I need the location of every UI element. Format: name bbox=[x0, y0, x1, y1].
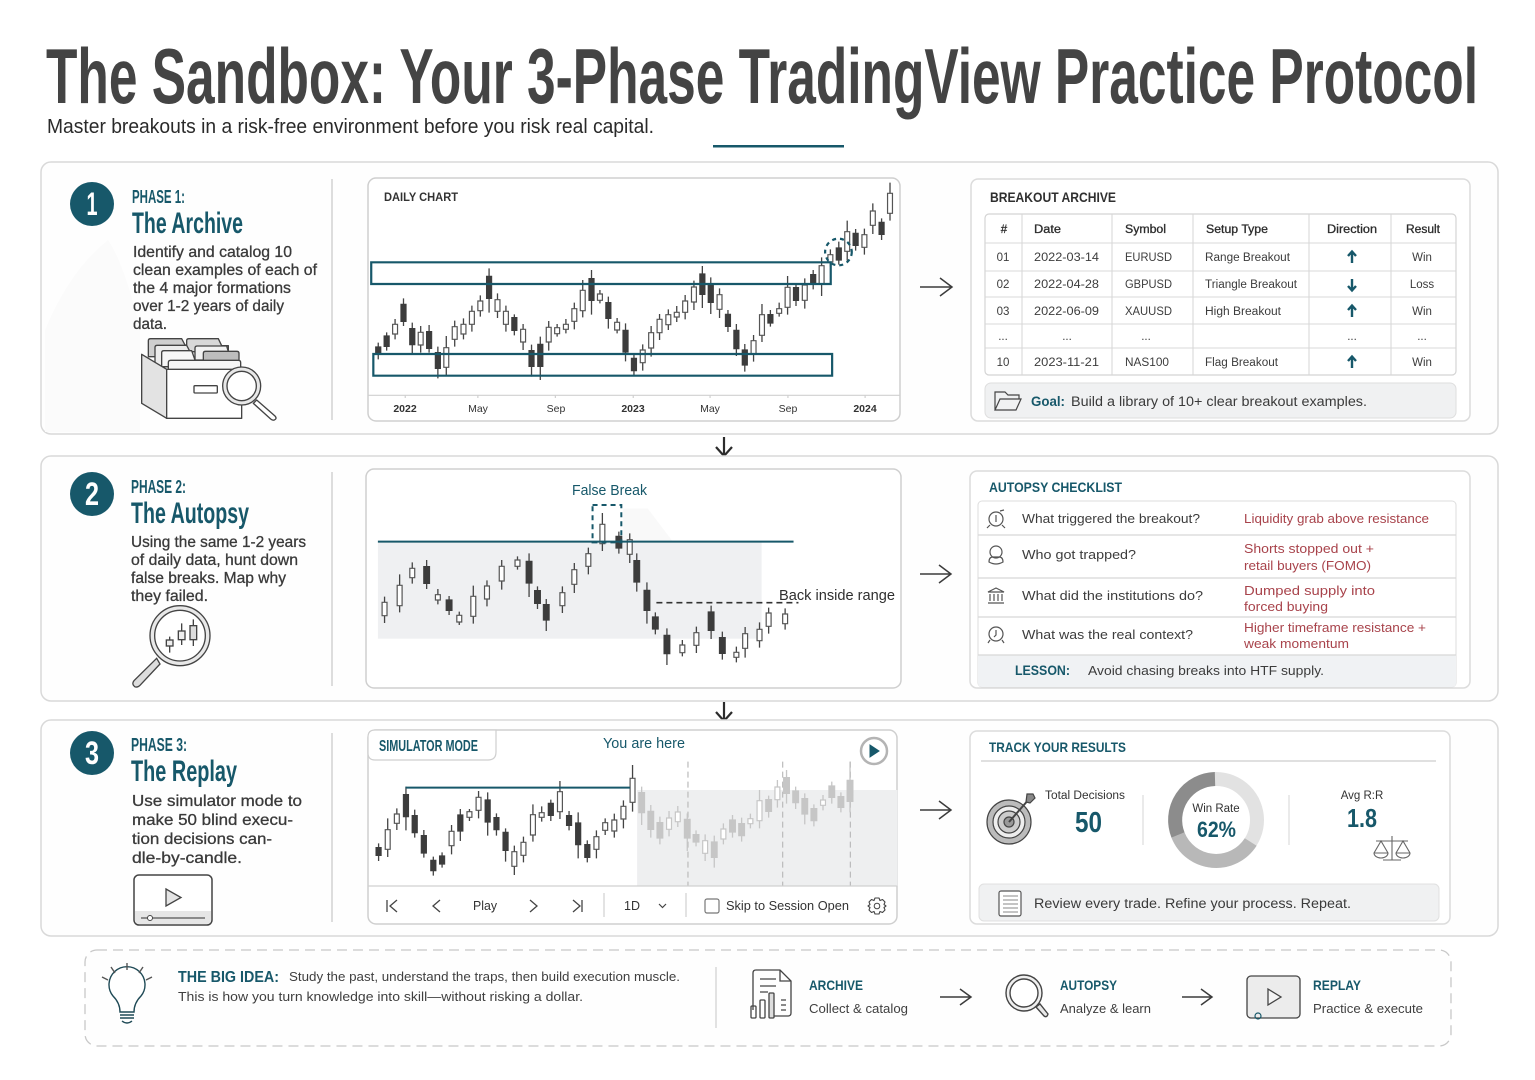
simulator mode tab bbox=[368, 730, 496, 760]
big idea text: This is how you turn knowledge into skill—without risking a dollar. bbox=[178, 989, 583, 1004]
archive table: # bbox=[1001, 224, 1008, 236]
phase 1 description: Identify and catalog 10 bbox=[133, 244, 292, 261]
play button bbox=[861, 738, 887, 764]
archive table: 10 bbox=[997, 357, 1009, 369]
playback controls: 1D bbox=[624, 898, 640, 913]
archive table: 01 bbox=[997, 252, 1009, 264]
flow step: autopsy bbox=[1006, 975, 1151, 1017]
flow step: replay: Practice & execute bbox=[1313, 1001, 1423, 1016]
chart heading: DAILY CHART bbox=[384, 190, 459, 204]
simulator mode tab: SIMULATOR MODE bbox=[379, 738, 478, 755]
phase 3 description: dle-by-candle. bbox=[132, 850, 242, 867]
archive table: XAUUSD bbox=[1125, 306, 1172, 318]
icon: trapped person bbox=[989, 546, 1003, 564]
phase 2 description: false breaks. Map why bbox=[131, 570, 286, 587]
candlesticks and range bbox=[378, 504, 798, 665]
phase 1 number badge bbox=[70, 182, 114, 226]
playback controls: Play bbox=[473, 898, 497, 913]
big idea text: Study the past, understand the traps, then build execution muscle. bbox=[289, 969, 680, 984]
archive table: Result bbox=[1406, 224, 1441, 236]
phase 2 number badge bbox=[70, 472, 114, 516]
chart time axis: Sep bbox=[779, 403, 797, 415]
flow step: replay bbox=[1247, 976, 1423, 1019]
archive table: Win bbox=[1412, 357, 1432, 369]
phase 1 name: The Archive bbox=[132, 207, 243, 240]
flow step: autopsy: AUTOPSY bbox=[1060, 977, 1118, 993]
archive table: NAS100 bbox=[1125, 357, 1169, 369]
panel: track your results bbox=[970, 731, 1450, 924]
archive table: 2022-06-09 bbox=[1034, 306, 1099, 318]
archive table: Date bbox=[1034, 224, 1061, 236]
panel: phase 2 bbox=[41, 456, 1498, 701]
phase 3 description: make 50 blind execu- bbox=[132, 812, 293, 829]
chart time axis: May bbox=[468, 403, 489, 415]
checklist table: forced buying bbox=[1244, 599, 1328, 614]
phase 3 description: tion decisions can- bbox=[132, 831, 272, 848]
direction arrows bbox=[1348, 252, 1356, 368]
icon: institution bbox=[988, 588, 1004, 603]
playback controls bbox=[387, 893, 886, 917]
metric: total decisions: Total Decisions bbox=[1045, 790, 1125, 802]
archive table: Symbol bbox=[1125, 224, 1166, 236]
icon: context clock bbox=[988, 627, 1004, 643]
panel: phase 1 bbox=[41, 162, 1498, 434]
candlesticks and zones bbox=[368, 182, 900, 398]
checklist table bbox=[978, 501, 1456, 687]
metric: average risk reward: 1.8 bbox=[1347, 803, 1377, 833]
icon: light bulb bbox=[102, 963, 152, 1023]
checklist table: weak momentum bbox=[1243, 636, 1349, 651]
donut chart: win rate: 62% bbox=[1197, 817, 1236, 842]
chart time axis: 2024 bbox=[853, 403, 877, 415]
goal callout: Goal: bbox=[1031, 394, 1065, 409]
playback controls: Skip to Session Open bbox=[726, 898, 849, 913]
review callout bbox=[979, 884, 1439, 921]
phase 2 description: they failed. bbox=[131, 588, 208, 605]
archive table: Range Breakout bbox=[1205, 252, 1291, 264]
phase 3 number badge: 3 bbox=[85, 735, 99, 771]
archive table: Flag Breakout bbox=[1205, 357, 1279, 369]
archive table: Win bbox=[1412, 306, 1432, 318]
metric: average risk reward bbox=[1341, 790, 1383, 833]
icon: video player bbox=[134, 875, 212, 925]
archive table: Direction bbox=[1327, 224, 1377, 236]
donut chart: win rate bbox=[1175, 779, 1257, 861]
panel: phase 3 bbox=[41, 720, 1498, 936]
archive table: ... bbox=[1062, 331, 1072, 343]
phase 3 description bbox=[132, 793, 302, 867]
back inside range label: Back inside range bbox=[779, 588, 895, 604]
phase 2 name: The Autopsy bbox=[131, 497, 249, 530]
archive table: Setup Type bbox=[1206, 224, 1268, 236]
checklist table: Shorts stopped out + bbox=[1244, 541, 1374, 556]
archive table: 02 bbox=[997, 279, 1009, 291]
phase 2 label: PHASE 2: bbox=[131, 477, 186, 497]
review callout: Review every trade. Refine your process. Repeat. bbox=[1034, 896, 1351, 911]
arrow bbox=[716, 437, 732, 456]
phase 2 description: Using the same 1-2 years bbox=[131, 534, 306, 551]
checklist table: What did the institutions do? bbox=[1022, 588, 1203, 603]
flow step: archive bbox=[751, 970, 908, 1018]
icon: target with arrow bbox=[987, 794, 1035, 844]
chart time axis: 2022 bbox=[393, 403, 417, 415]
checklist table: Who got trapped? bbox=[1022, 547, 1136, 562]
results heading: TRACK YOUR RESULTS bbox=[989, 739, 1126, 755]
checklist table: Dumped supply into bbox=[1244, 583, 1375, 598]
arrow bbox=[920, 565, 951, 583]
chart: simulator mode bbox=[368, 730, 897, 924]
checklist table: Higher timeframe resistance + bbox=[1244, 620, 1426, 635]
big idea text: THE BIG IDEA: bbox=[178, 969, 279, 986]
flow step: archive: Collect & catalog bbox=[809, 1001, 908, 1016]
subtitle: Master breakouts in a risk-free environment before you risk real capital. bbox=[47, 116, 654, 138]
arrow bbox=[716, 702, 732, 721]
archive table: 2022-04-28 bbox=[1034, 279, 1099, 291]
archive table: ... bbox=[998, 331, 1008, 343]
checklist heading: AUTOPSY CHECKLIST bbox=[989, 479, 1122, 495]
phase 1 description: the 4 major formations bbox=[133, 280, 291, 297]
icon: target question bbox=[987, 510, 1005, 528]
chart: daily chart bbox=[368, 178, 900, 421]
metric: average risk reward: Avg R:R bbox=[1341, 790, 1383, 802]
checklist table: retail buyers (FOMO) bbox=[1244, 558, 1371, 573]
chart time axis: May bbox=[700, 403, 721, 415]
phase 1 description: over 1-2 years of daily bbox=[133, 298, 284, 315]
flow step: autopsy: Analyze & learn bbox=[1060, 1001, 1151, 1016]
big idea text bbox=[178, 969, 680, 1004]
archive table: ... bbox=[1417, 331, 1427, 343]
donut chart: win rate: Win Rate bbox=[1192, 803, 1240, 815]
icon: magnifier over candles bbox=[132, 605, 211, 688]
icon: archive box with magnifier bbox=[141, 338, 277, 421]
phase 1 description: clean examples of each of bbox=[133, 262, 318, 279]
archive table: High Breakout bbox=[1205, 306, 1282, 318]
goal callout: Build a library of 10+ clear breakout examples. bbox=[1071, 394, 1367, 409]
metric: total decisions bbox=[1045, 790, 1125, 839]
phase 1 description bbox=[133, 244, 318, 333]
arrow bbox=[920, 278, 952, 296]
panel: breakout archive bbox=[971, 179, 1470, 421]
false break label: False Break bbox=[572, 483, 648, 499]
phase 1 description: data. bbox=[133, 316, 167, 333]
lesson: LESSON: bbox=[1015, 663, 1070, 678]
checklist table: Liquidity grab above resistance bbox=[1244, 511, 1429, 526]
chart time axis: Sep bbox=[547, 403, 565, 415]
phase 2 description bbox=[131, 534, 306, 605]
flow step: replay: REPLAY bbox=[1313, 977, 1362, 993]
icon: balance scale bbox=[1374, 836, 1410, 860]
lesson: Avoid chasing breaks into HTF supply. bbox=[1088, 663, 1324, 678]
arrow bbox=[1182, 989, 1212, 1005]
phase 3 description: Use simulator mode to bbox=[132, 793, 302, 810]
simulator candlesticks bbox=[368, 762, 898, 887]
phase 1 number badge: 1 bbox=[86, 186, 98, 222]
archive table: ... bbox=[1141, 331, 1151, 343]
phase 2 description: of daily data, hunt down bbox=[131, 552, 298, 569]
chart: false break bbox=[366, 469, 901, 688]
panel: autopsy checklist bbox=[970, 471, 1470, 688]
archive table: GBPUSD bbox=[1125, 279, 1172, 291]
archive table: Triangle Breakout bbox=[1205, 279, 1298, 291]
goal callout bbox=[985, 383, 1456, 418]
flow step: archive: ARCHIVE bbox=[809, 977, 863, 993]
phase 3 name: The Replay bbox=[131, 755, 237, 788]
archive table: 2023-11-21 bbox=[1034, 357, 1099, 369]
chart time axis bbox=[393, 403, 877, 415]
phase 1 label: PHASE 1: bbox=[132, 187, 185, 207]
panel: the big idea bbox=[85, 950, 1451, 1046]
checklist table: What triggered the breakout? bbox=[1022, 511, 1200, 526]
chart time axis: 2023 bbox=[621, 403, 645, 415]
archive table: ... bbox=[1347, 331, 1357, 343]
arrow bbox=[920, 801, 951, 819]
checklist table: What was the real context? bbox=[1022, 627, 1193, 642]
archive table: 2022-03-14 bbox=[1034, 252, 1100, 264]
archive table: Loss bbox=[1410, 279, 1434, 291]
phase 3 number badge bbox=[70, 731, 114, 775]
archive table: Win bbox=[1412, 252, 1432, 264]
you are here label: You are here bbox=[603, 736, 685, 752]
archive table: 03 bbox=[997, 306, 1009, 318]
archive table: EURUSD bbox=[1125, 252, 1172, 264]
title accent rule bbox=[713, 145, 844, 148]
metric: total decisions: 50 bbox=[1075, 807, 1102, 839]
phase 2 number badge: 2 bbox=[85, 476, 99, 512]
arrow bbox=[940, 989, 971, 1005]
archive table bbox=[985, 214, 1456, 375]
phase 3 label: PHASE 3: bbox=[131, 735, 187, 755]
archive heading: BREAKOUT ARCHIVE bbox=[990, 189, 1116, 205]
